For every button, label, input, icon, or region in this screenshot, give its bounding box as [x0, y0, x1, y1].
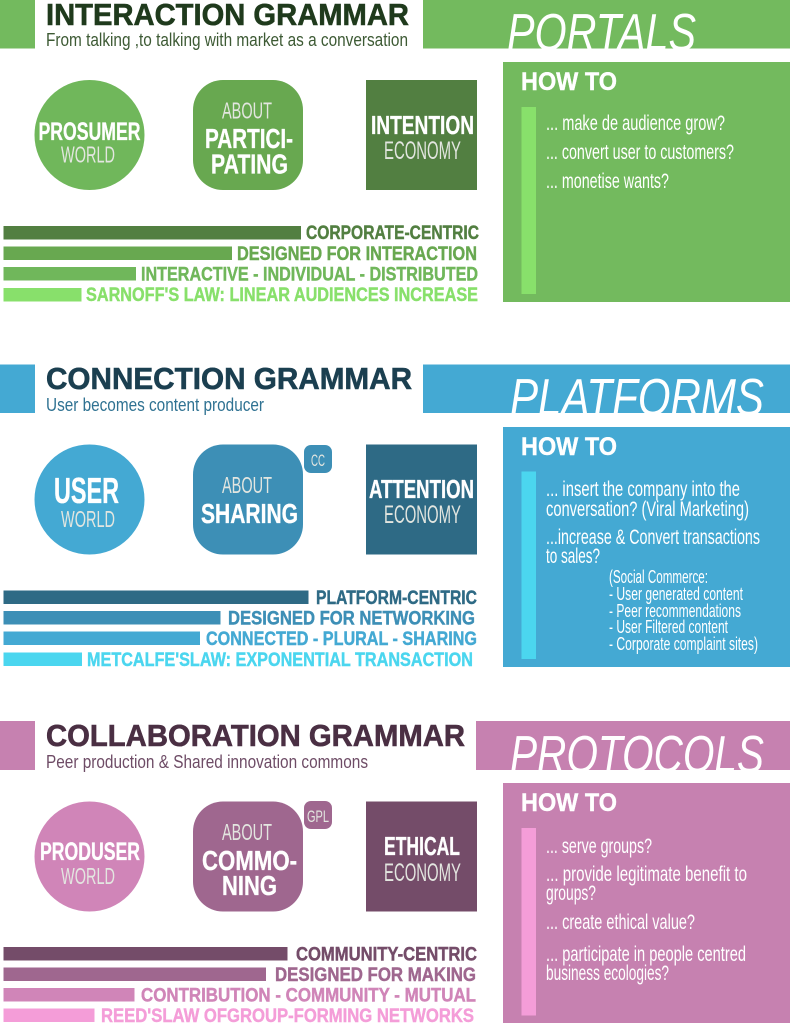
bar row: community-centric: [4, 944, 477, 966]
bar row: platform-centric: PLATFORM-CENTRIC: [316, 587, 477, 609]
bar row: interactive individual distributed: [4, 264, 478, 286]
panel: how to protocols: ... create ethical value?: [546, 911, 695, 934]
bar row: corporate-centric: CORPORATE-CENTRIC: [306, 222, 479, 244]
banner: portals: [423, 0, 790, 62]
bar row: designed for interaction: [4, 243, 477, 265]
icon: ethical economy square: ECONOMY: [384, 859, 461, 887]
icon: produser world circle: WORLD: [61, 863, 115, 889]
icon: intention economy square: ECONOMY: [384, 137, 461, 165]
bar row: corporate-centric: [4, 222, 479, 244]
icon: about sharing rounded square: [193, 444, 303, 554]
icon: attention economy square: [366, 444, 477, 554]
subtitle: Peer production & Shared innovation commons: [46, 752, 368, 772]
bar row: designed for making: DESIGNED FOR MAKING: [275, 964, 476, 986]
bar row: designed for interaction: DESIGNED FOR INTERACTION: [237, 243, 477, 265]
banner: portals: PORTALS: [507, 4, 696, 62]
icon: about commoning rounded square: [193, 802, 303, 912]
icon: ethical economy square: ETHICAL: [384, 831, 460, 861]
section: interaction grammar: [0, 0, 790, 306]
icon: about participating rounded square: ABOUT: [222, 98, 272, 124]
panel: how to portals: ... monetise wants?: [546, 170, 669, 193]
title: connection grammar: CONNECTION GRAMMAR: [46, 361, 412, 396]
panel: how to protocols: HOW TO: [521, 789, 617, 817]
icon: about participating rounded square: PARTICI-: [205, 123, 293, 154]
header accent square: [0, 364, 35, 413]
subtitle: User becomes content producer: [46, 395, 264, 415]
icon: user world circle: USER: [54, 470, 119, 511]
bar row: reed's law: [4, 1005, 474, 1024]
icon: intention economy square: [366, 80, 477, 190]
icon: about commoning rounded square: NING: [222, 870, 277, 901]
panel: how to protocols: business ecologies?: [546, 962, 669, 985]
icon: about participating rounded square: PATING: [211, 148, 288, 180]
panel: how to protocols: [503, 783, 790, 1023]
panel: how to portals: [503, 62, 790, 302]
icon: prosumer world circle: [34, 80, 144, 190]
bar row: community-centric: COMMUNITY-CENTRIC: [296, 944, 477, 966]
panel: how to protocols: ... serve groups?: [546, 835, 652, 858]
bar row: interactive individual distributed: INTERACTIVE - INDIVIDUAL - DISTRIBUTED: [141, 264, 478, 286]
badge: cc: [304, 445, 332, 473]
icon: user world circle: WORLD: [61, 506, 115, 532]
bar row: contribution community mutual: CONTRIBUTION - COMMUNITY - MUTUAL: [141, 984, 476, 1006]
header accent square: [0, 0, 35, 48]
panel: how to platforms: [503, 427, 790, 667]
icon: produser world circle: PRODUSER: [40, 838, 140, 866]
icon: about commoning rounded square: ABOUT: [222, 819, 272, 845]
icon: about sharing rounded square: ABOUT: [222, 472, 272, 498]
panel: how to portals: HOW TO: [521, 68, 617, 96]
section: collaboration grammar: [0, 718, 790, 1024]
icon: produser world circle: [34, 802, 144, 912]
bar row: metcalfe's law: METCALFE'SLAW: EXPONENTIAL TRANSACTION: [87, 649, 473, 671]
icon: prosumer world circle: PROSUMER: [38, 118, 140, 146]
icon: attention economy square: ATTENTION: [369, 474, 474, 504]
panel: how to platforms: (Social Commerce:: [609, 567, 708, 587]
bar row: platform-centric: [4, 587, 477, 609]
header accent square: [0, 721, 35, 770]
bar row: designed for networking: DESIGNED FOR NETWORKING: [228, 608, 475, 630]
section: connection grammar: [0, 361, 790, 671]
panel: how to protocols: groups?: [546, 882, 596, 905]
title: collaboration grammar: COLLABORATION GRAMMAR: [46, 718, 465, 753]
icon: about commoning rounded square: COMMO-: [202, 845, 297, 876]
subtitle: From talking ,to talking with market as a conversation: [46, 30, 408, 50]
icon: ethical economy square: [366, 802, 477, 912]
icon: about sharing rounded square: SHARING: [201, 498, 298, 529]
panel: how to platforms: HOW TO: [521, 433, 617, 461]
bar row: connected plural sharing: CONNECTED - PLURAL - SHARING: [206, 628, 477, 650]
bar row: designed for making: [4, 964, 476, 986]
badge: gpl: GPL: [307, 807, 329, 826]
bar row: contribution community mutual: [4, 984, 476, 1006]
icon: intention economy square: INTENTION: [371, 110, 474, 140]
icon: prosumer world circle: WORLD: [61, 142, 115, 168]
badge: cc: CC: [311, 451, 325, 470]
badge: gpl: [304, 801, 332, 829]
icon: about participating rounded square: [193, 80, 303, 190]
bar row: connected plural sharing: [4, 628, 477, 650]
icon: user world circle: [34, 444, 144, 554]
icon: attention economy square: ECONOMY: [384, 501, 461, 529]
bar row: designed for networking: [4, 608, 475, 630]
panel: how to platforms: to sales?: [546, 545, 600, 568]
panel: how to platforms: - User Filtered content: [609, 617, 728, 637]
bar row: sarnoff's law: SARNOFF'S LAW: LINEAR AUDIENCES INCREASE: [86, 284, 478, 306]
